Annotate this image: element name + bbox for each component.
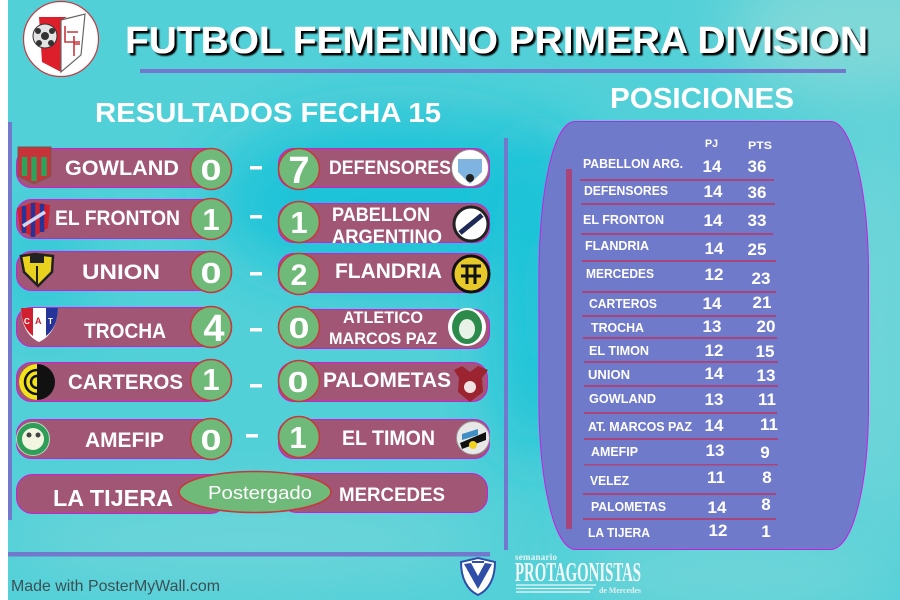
standings rows: 8 bbox=[762, 468, 772, 487]
standings rows: CARTEROS bbox=[589, 296, 657, 311]
match: La Tijera vs Mercedes postponed: MERCEDES bbox=[339, 485, 445, 506]
bottom divider bar bbox=[8, 552, 490, 556]
column headers bbox=[705, 138, 772, 152]
standings rows: 12 bbox=[709, 521, 727, 540]
standings rows: 13 bbox=[703, 317, 721, 336]
standings rows: FLANDRIA bbox=[585, 238, 650, 253]
standings rows: 15 bbox=[756, 342, 774, 361]
standings rows: DEFENSORES bbox=[584, 183, 668, 198]
icon: Union crest bbox=[21, 254, 53, 286]
standings rows: 13 bbox=[705, 390, 723, 409]
postponed badge bbox=[179, 472, 331, 512]
standings rows: 8 bbox=[761, 495, 771, 514]
panel: standings table bbox=[539, 122, 868, 550]
match: Trocha vs Atletico Marcos Paz: TROCHA bbox=[84, 320, 166, 343]
standings rows: LA TIJERA bbox=[588, 525, 651, 540]
standings rows: 23 bbox=[752, 269, 770, 288]
standings rows: 14 bbox=[705, 239, 724, 258]
icon: El Fronton crest bbox=[17, 202, 50, 237]
standings rows: AT. MARCOS PAZ bbox=[588, 419, 692, 434]
match: Union vs Flandria: UNION bbox=[82, 261, 160, 284]
icon: Gowland crest bbox=[18, 147, 51, 184]
match: Trocha vs Atletico Marcos Paz bbox=[16, 306, 490, 350]
icon: Trocha crest: T bbox=[48, 317, 53, 326]
table rules bbox=[580, 179, 778, 520]
logo: league crest bbox=[24, 2, 98, 76]
standings rows: 12 bbox=[705, 265, 723, 284]
match: Amefip vs El Timon: EL TIMON bbox=[342, 427, 435, 450]
standings rows: 1 bbox=[761, 522, 771, 541]
icon: Trocha crest bbox=[21, 308, 58, 342]
standings rows: 20 bbox=[757, 317, 775, 336]
match: La Tijera vs Mercedes postponed bbox=[16, 472, 488, 514]
icon: Atletico Marcos Paz crest bbox=[448, 308, 486, 346]
logo: Protagonistas bbox=[515, 552, 641, 595]
match: Trocha vs Atletico Marcos Paz: 0 bbox=[288, 313, 310, 345]
standings rows: VELEZ bbox=[590, 473, 629, 488]
match: Gowland vs Defensores: 7 bbox=[288, 150, 310, 192]
match: Amefip vs El Timon: 0 bbox=[200, 425, 222, 457]
standings rows: MERCEDES bbox=[586, 266, 654, 281]
standings rows: GOWLAND bbox=[589, 391, 656, 406]
standings rows: 25 bbox=[748, 240, 766, 259]
standings rows: 14 bbox=[704, 182, 723, 201]
watermark: Made with PosterMyWall.com bbox=[11, 578, 220, 595]
standings rows: 33 bbox=[748, 211, 766, 230]
match: Carteros vs Palometas bbox=[16, 360, 488, 402]
standings rows: 14 bbox=[703, 294, 722, 313]
middle divider bar bbox=[504, 138, 508, 550]
match: El Fronton vs Pabellon Argentino: ARGENTINO bbox=[332, 227, 442, 248]
match: Gowland vs Defensores bbox=[16, 147, 490, 192]
table accent bar bbox=[566, 169, 572, 529]
logo: Protagonistas: PROTAGONISTAS bbox=[515, 557, 641, 587]
title: FUTBOL FEMENINO PRIMERA DIVISION bbox=[125, 20, 868, 62]
match: Gowland vs Defensores: GOWLAND bbox=[65, 157, 179, 180]
match: El Fronton vs Pabellon Argentino: 1 bbox=[202, 202, 220, 237]
logo: Protagonistas: semanario bbox=[515, 552, 558, 562]
logo: Protagonistas: de Mercedes bbox=[599, 586, 641, 595]
standings rows: 36 bbox=[748, 183, 766, 202]
match: Trocha vs Atletico Marcos Paz: 4 bbox=[203, 308, 225, 350]
standings rows: 12 bbox=[705, 341, 723, 360]
match: La Tijera vs Mercedes postponed: Postergado bbox=[208, 483, 312, 503]
match: Carteros vs Palometas: 0 bbox=[288, 367, 308, 399]
match: Amefip vs El Timon bbox=[16, 416, 490, 460]
icon: Defensores crest bbox=[452, 150, 488, 186]
icon: Carteros crest bbox=[19, 364, 55, 400]
match: Amefip vs El Timon: 1 bbox=[289, 420, 307, 455]
match: Union vs Flandria bbox=[16, 252, 490, 294]
match: Gowland vs Defensores: 0 bbox=[200, 155, 222, 187]
column headers: PTS bbox=[748, 140, 772, 152]
match: Gowland vs Defensores: DEFENSORES bbox=[329, 158, 451, 179]
match: Amefip vs El Timon: AMEFIP bbox=[85, 429, 164, 452]
match: Carteros vs Palometas: PALOMETAS bbox=[323, 369, 451, 392]
icon: Trocha crest: A bbox=[35, 316, 42, 326]
standings rows: EL FRONTON bbox=[583, 212, 664, 227]
match: Union vs Flandria: 0 bbox=[200, 258, 222, 290]
heading: posiciones: POSICIONES bbox=[610, 83, 794, 115]
standings rows: 14 bbox=[705, 416, 724, 435]
match: Carteros vs Palometas: 1 bbox=[202, 362, 220, 397]
standings rows: EL TIMON bbox=[589, 343, 649, 358]
standings rows: 13 bbox=[706, 441, 724, 460]
standings rows: PALOMETAS bbox=[591, 499, 666, 514]
match: Trocha vs Atletico Marcos Paz: MARCOS PAZ bbox=[329, 329, 437, 348]
standings rows: PABELLON ARG. bbox=[583, 156, 683, 171]
match: Carteros vs Palometas: CARTEROS bbox=[68, 371, 183, 394]
standings rows: 11 bbox=[760, 415, 778, 434]
standings rows: 14 bbox=[703, 157, 722, 176]
standings rows: 14 bbox=[708, 498, 727, 517]
match: El Fronton vs Pabellon Argentino bbox=[16, 198, 490, 248]
match: El Fronton vs Pabellon Argentino: EL FRONTON bbox=[55, 207, 180, 230]
icon: Trocha crest: C bbox=[24, 317, 30, 326]
heading: resultados: RESULTADOS FECHA 15 bbox=[95, 97, 441, 128]
standings rows: 9 bbox=[760, 443, 770, 462]
icon: Amefip crest bbox=[16, 422, 50, 456]
standings rows: 14 bbox=[705, 364, 724, 383]
left divider bar bbox=[8, 122, 12, 520]
match: El Fronton vs Pabellon Argentino: 1 bbox=[290, 205, 308, 240]
icon: Velez shield bbox=[461, 558, 495, 595]
standings rows: TROCHA bbox=[591, 320, 645, 335]
match: El Fronton vs Pabellon Argentino: PABELLON bbox=[332, 205, 430, 226]
match: Union vs Flandria: 2 bbox=[291, 259, 307, 292]
standings rows: 14 bbox=[704, 211, 723, 230]
standings rows: 36 bbox=[748, 157, 766, 176]
standings rows: 11 bbox=[758, 390, 776, 409]
column headers: PJ bbox=[705, 138, 718, 150]
standings rows bbox=[583, 156, 778, 541]
standings rows: AMEFIP bbox=[591, 444, 638, 459]
standings rows: 13 bbox=[757, 366, 775, 385]
icon: Pabellon Argentino crest bbox=[454, 207, 488, 241]
title underline bbox=[140, 69, 846, 73]
standings rows: 21 bbox=[753, 293, 771, 312]
standings rows: UNION bbox=[588, 367, 630, 382]
match: Trocha vs Atletico Marcos Paz: ATLETICO bbox=[343, 308, 423, 327]
standings rows: 11 bbox=[707, 468, 725, 487]
match: La Tijera vs Mercedes postponed: LA TIJERA bbox=[53, 485, 173, 511]
match: Union vs Flandria: FLANDRIA bbox=[335, 260, 442, 283]
icon: Flandria crest bbox=[453, 256, 489, 292]
icon: El Timon crest bbox=[456, 422, 490, 454]
icon: Palometas crest bbox=[454, 366, 488, 402]
